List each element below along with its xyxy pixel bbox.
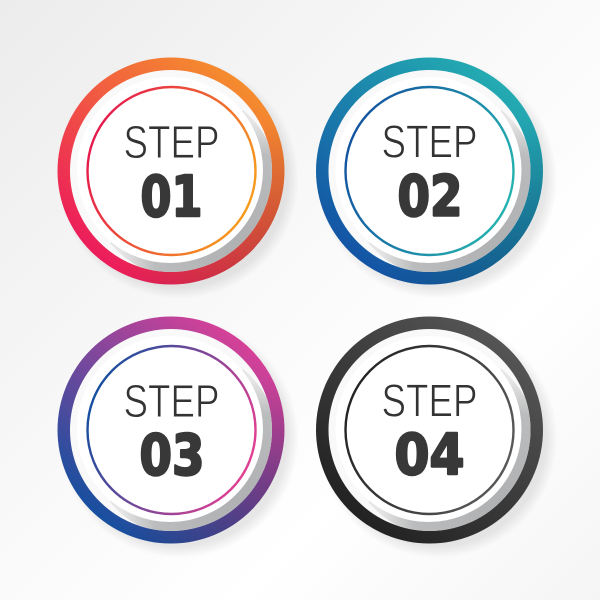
badge: step 01: STEP [124,116,220,168]
badge: step 03: STEP [124,375,220,427]
badge: step 04 [316,316,558,558]
badge: step 03: 03 [140,424,204,488]
badge: step 02 [316,58,558,299]
badge: step 04: STEP [382,374,478,426]
badge: step 02: 02 [398,164,462,230]
badge: step 01: 01 [140,165,202,230]
badge: step 04: 04 [394,423,464,488]
badge: step 02: STEP [382,116,478,168]
badge: step 01 [58,58,299,299]
badge: step 03 [58,316,299,558]
